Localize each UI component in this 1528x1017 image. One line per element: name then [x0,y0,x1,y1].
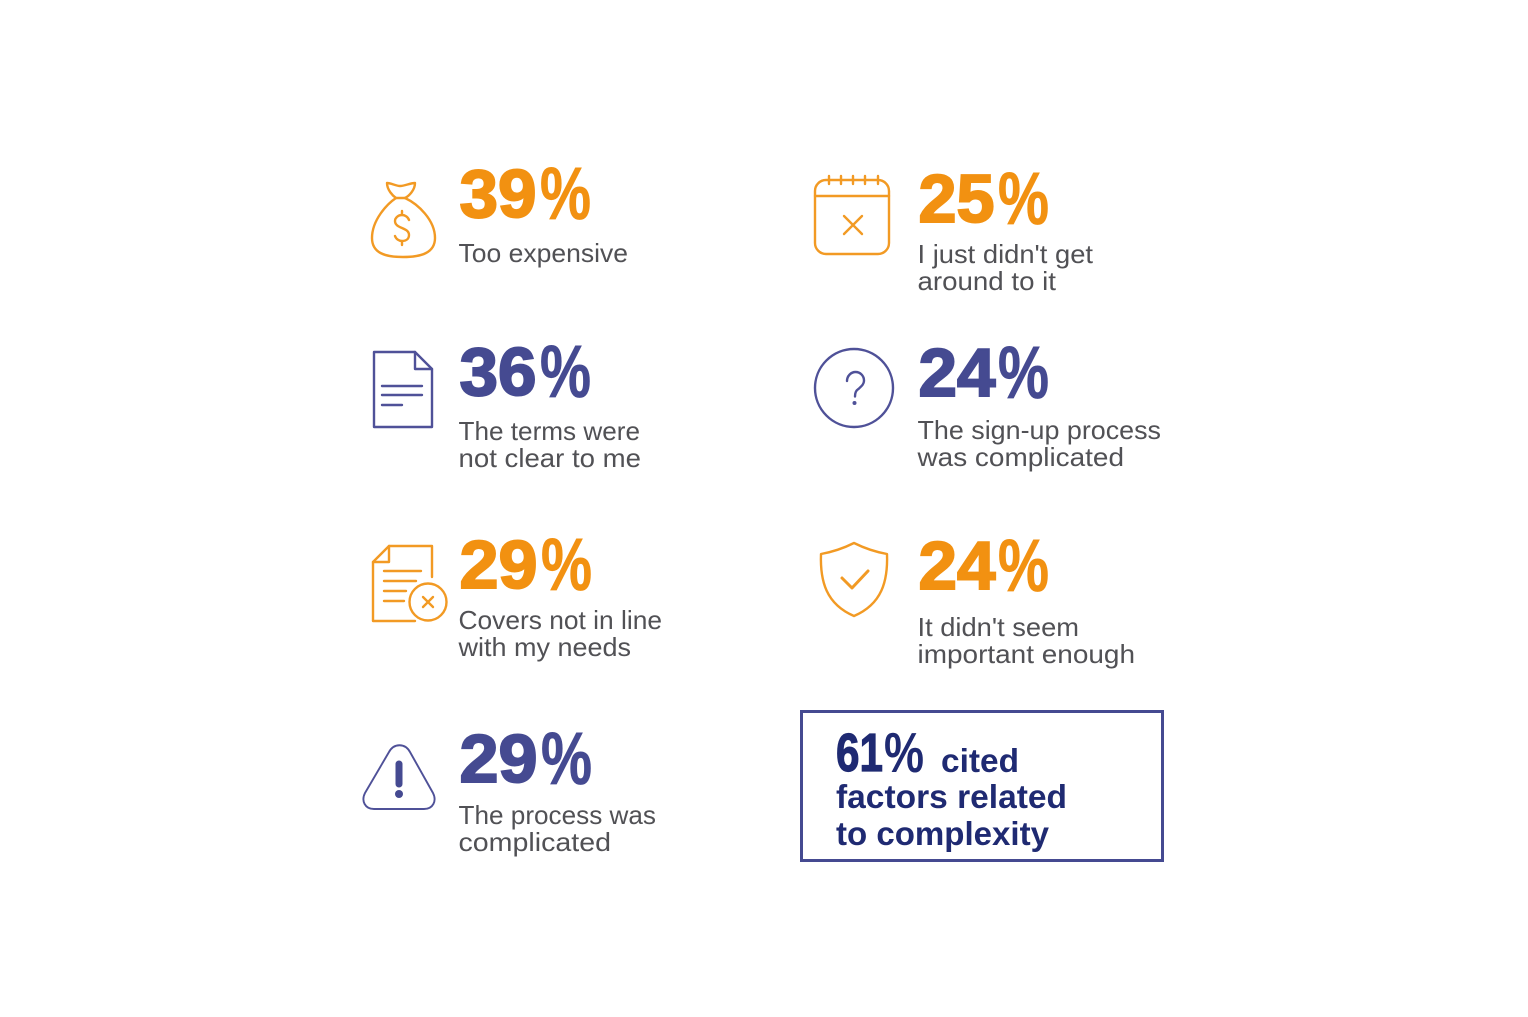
callout border [802,712,1162,860]
label: covers not in line: with my needs [457,632,631,662]
panel: 36% terms not clear [374,330,641,473]
callout text: factors related [836,778,1067,815]
icon: money bag [372,183,435,257]
label: didn't get around to it: I just didn't get [918,239,1094,269]
label: process complicated: complicated [458,827,611,857]
stat: 29% [460,523,592,606]
stat: 39% [460,152,591,235]
stat: 36%: 36 [460,334,536,410]
panel: 24% sign-up complicated [815,331,1161,472]
label: terms not clear [458,416,641,473]
stat: 25%: 25 [918,161,994,237]
stat: 24% [918,331,1049,414]
icon: document [374,352,432,427]
label: covers not in line [457,605,662,662]
stat: 36% [460,330,591,413]
label: covers not in line: Covers not in line [458,605,662,635]
label: sign-up complicated: was complicated [916,442,1124,472]
icon: warning triangle [363,745,435,809]
label: too expensive: Too expensive [458,238,628,268]
stat: 29%: 29 [460,721,538,797]
panel: 25% didn't get around to it [815,157,1094,296]
stat: 29% [460,717,592,800]
label: sign-up complicated: The sign-up process [918,415,1161,445]
stat: 61% [836,721,924,785]
label: sign-up complicated [916,415,1161,472]
label: didn't get around to it [918,239,1094,296]
panel: 39% too expensive [372,152,628,268]
label: not important enough: It didn't seem [918,612,1079,642]
stat: 24%: 24 [918,335,996,411]
stat: 24% [918,524,1049,607]
stat: 61%: 61 [836,723,883,783]
label: terms not clear: not clear to me [458,443,641,473]
stat: 36%: % [540,330,591,413]
icon: document with cross [373,546,446,621]
stat: 61%: % [884,721,924,785]
panel: 29% process complicated [363,717,656,857]
stat: 39%: 39 [460,156,536,232]
stat: 24%: 24 [918,528,996,604]
callout: 61% complexity [802,712,1162,860]
icon: shield with check [821,543,887,616]
stat: 24%: % [998,331,1049,414]
stat: 39%: % [540,152,591,235]
callout text: to complexity [836,815,1050,852]
label: process complicated: The process was [458,800,656,830]
callout text [836,742,1067,852]
stat: 29%: % [541,523,592,606]
panel: 29% covers not in line [373,523,662,662]
callout text: cited [941,742,1019,779]
label: not important enough [918,612,1135,669]
stat: 24%: % [998,524,1049,607]
stat: 25% [918,157,1049,240]
stat: 29%: % [541,717,592,800]
label: didn't get around to it: around to it [918,266,1057,296]
icon: calendar with cross [815,176,889,254]
label: process complicated [458,800,656,857]
icon: question mark circle [815,349,893,427]
stat: 29%: 29 [460,527,538,603]
panel: 24% not important enough [821,524,1135,669]
label: terms not clear: The terms were [458,416,640,446]
label: not important enough: important enough [918,639,1135,669]
stat: 25%: % [998,157,1049,240]
